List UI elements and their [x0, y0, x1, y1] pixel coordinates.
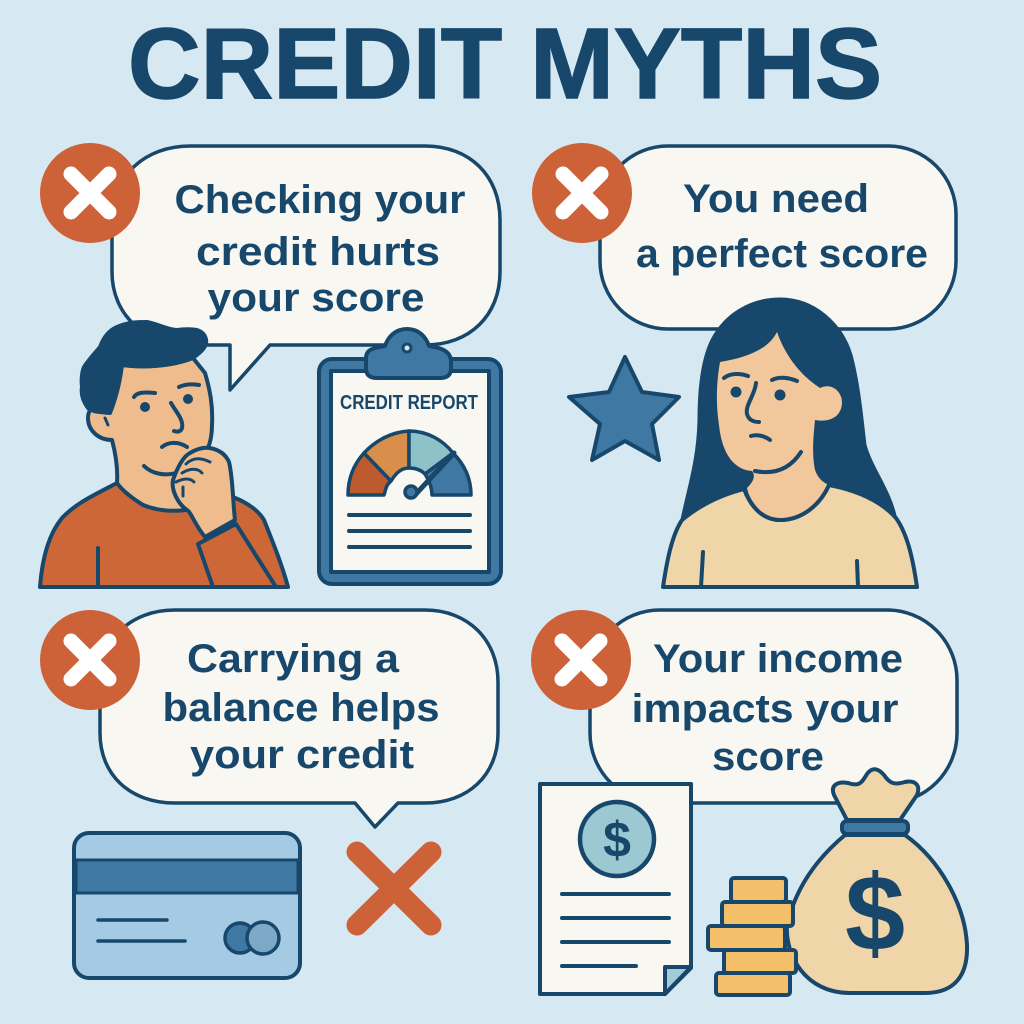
myth text 4: [632, 637, 903, 779]
panel: income impacts score: [531, 610, 967, 995]
icon: red x badge 4: [531, 610, 631, 710]
myth text 2: You need: [683, 177, 869, 221]
myth text 1: [174, 178, 466, 320]
icon: credit card: [74, 833, 300, 978]
title: CREDIT MYTHS: [128, 8, 882, 120]
income document: [540, 784, 691, 994]
gauge needle: [405, 453, 454, 498]
icon: red x badge 1: [40, 143, 140, 243]
clipboard label: CREDIT REPORT: [340, 392, 478, 414]
panel: perfect score: [532, 143, 956, 587]
score gauge: [348, 431, 471, 495]
myth text 3: Carrying a: [187, 637, 400, 681]
speech bubble 3: [100, 610, 498, 827]
panel: checking your credit: [40, 143, 501, 587]
clipboard clip: [366, 329, 451, 378]
myth text 1: your score: [208, 276, 424, 320]
income document: $: [603, 812, 631, 868]
myth text 3: balance helps: [162, 686, 440, 730]
speech bubble 4: [590, 610, 957, 803]
myth text 3: your credit: [190, 733, 414, 777]
myth text 3: [162, 637, 440, 777]
speech bubble 1: [112, 146, 500, 390]
myth text 2: a perfect score: [636, 232, 928, 276]
speech bubble 2: [600, 146, 956, 329]
myth text 4: score: [712, 735, 824, 779]
money bag: [787, 769, 967, 993]
money bag: $: [845, 852, 905, 973]
man thinking: [40, 322, 288, 587]
icon: star: [569, 357, 679, 460]
woman worried: [663, 299, 917, 587]
icon: red x badge 2: [532, 143, 632, 243]
myth text 1: Checking your: [174, 178, 466, 222]
myth text 4: Your income: [653, 637, 903, 681]
panel: carrying a balance: [40, 610, 498, 978]
icon: red x badge 3: [40, 610, 140, 710]
myth text 4: impacts your: [632, 687, 898, 731]
coin stack: [708, 878, 796, 995]
clipboard credit report: [319, 329, 501, 584]
icon: large red x: [357, 852, 431, 925]
myth text 2: [636, 177, 928, 276]
myth text 1: credit hurts: [196, 230, 440, 274]
